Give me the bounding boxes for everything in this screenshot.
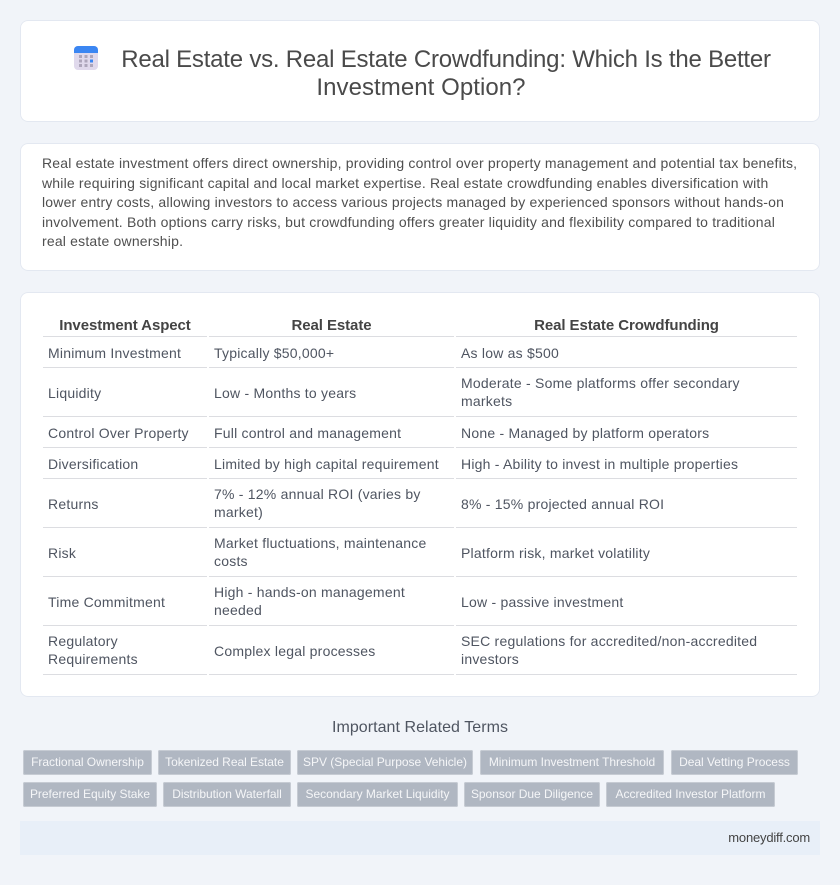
related term tags: Distribution Waterfall xyxy=(172,787,282,801)
row: minimum investment xyxy=(43,345,797,368)
row: minimum investment: Typically $50,000+ xyxy=(214,345,334,361)
related term tags: Fractional Ownership xyxy=(31,755,144,769)
row: diversification xyxy=(43,456,797,479)
related term tags xyxy=(23,750,798,807)
row: time commitment xyxy=(43,584,797,626)
related term tags: Deal Vetting Process xyxy=(679,755,790,769)
row: time commitment: Low - passive investment xyxy=(461,594,623,610)
row: diversification: High - Ability to invest in multiple properties xyxy=(461,456,738,472)
row: risk: Platform risk, market volatility xyxy=(461,545,650,561)
row: minimum investment: Minimum Investment xyxy=(48,345,181,361)
title: Investment Option? xyxy=(316,74,526,101)
row: regulatory requirements: investors xyxy=(461,651,519,667)
row: control over property: None - Managed by platform operators xyxy=(461,425,709,441)
row: returns: 8% - 15% projected annual ROI xyxy=(461,496,664,512)
row: time commitment: needed xyxy=(214,602,262,618)
row: regulatory requirements: Regulatory xyxy=(48,633,118,649)
table header: Real Estate xyxy=(292,317,372,334)
row: regulatory requirements xyxy=(43,633,797,675)
related term tags: SPV (Special Purpose Vehicle) xyxy=(303,755,467,769)
table header xyxy=(43,317,797,337)
row: diversification: Diversification xyxy=(48,456,138,472)
row: risk xyxy=(43,535,797,577)
title xyxy=(121,46,771,101)
row: control over property: Control Over Property xyxy=(48,425,189,441)
row: liquidity: markets xyxy=(461,393,512,409)
row: minimum investment: As low as $500 xyxy=(461,345,559,361)
row: risk: Market fluctuations, maintenance xyxy=(214,535,426,551)
row: liquidity xyxy=(43,375,797,417)
icon: calendar xyxy=(74,46,98,70)
text block: introduction: lower entry costs, allowing investors to access various projects managed by experienced sponsors without hands-on xyxy=(42,194,784,210)
text block: introduction xyxy=(42,155,797,249)
related term tags: Accredited Investor Platform xyxy=(616,787,765,801)
row: returns: Returns xyxy=(48,496,99,512)
table header: Investment Aspect xyxy=(59,317,191,334)
row: diversification: Limited by high capital requirement xyxy=(214,456,439,472)
title: Real Estate vs. Real Estate Crowdfunding: Which Is the Better xyxy=(121,46,771,73)
row: liquidity: Moderate - Some platforms offer secondary xyxy=(461,375,740,391)
text block: introduction: real estate ownership. xyxy=(42,233,183,249)
table header: Real Estate Crowdfunding xyxy=(534,317,719,334)
row: liquidity: Low - Months to years xyxy=(214,385,356,401)
row: regulatory requirements: Complex legal processes xyxy=(214,643,375,659)
related term tags: Tokenized Real Estate xyxy=(165,755,284,769)
heading: related terms: Important Related Terms xyxy=(332,719,508,736)
row: returns: market) xyxy=(214,504,263,520)
text block: introduction: Real estate investment offers direct ownership, providing control over property management and potential tax benefits, xyxy=(42,155,797,171)
row: time commitment: High - hands-on management xyxy=(214,584,405,600)
row: liquidity: Liquidity xyxy=(48,385,101,401)
related term tags: Sponsor Due Diligence xyxy=(471,787,593,801)
text block: introduction: involvement. Both options carry risks, but crowdfunding offers greater liquidity and flexibility compared to traditional xyxy=(42,214,775,230)
row: control over property xyxy=(43,425,797,448)
footer xyxy=(20,821,820,855)
related term tags: Preferred Equity Stake xyxy=(30,787,150,801)
related term tags: Secondary Market Liquidity xyxy=(306,787,449,801)
text block: introduction: while requiring significant capital and local market expertise. Real estate crowdfunding enables diversification with xyxy=(42,174,768,190)
row: time commitment: Time Commitment xyxy=(48,594,165,610)
row: returns xyxy=(43,486,797,528)
panel: comparison table xyxy=(20,292,820,697)
panel: introduction xyxy=(20,143,820,271)
panel: header xyxy=(20,20,820,122)
row: risk: Risk xyxy=(48,545,76,561)
row: returns: 7% - 12% annual ROI (varies by xyxy=(214,486,421,502)
row: regulatory requirements: SEC regulations for accredited/non-accredited xyxy=(461,633,757,649)
related term tags: Minimum Investment Threshold xyxy=(489,755,655,769)
row: risk: costs xyxy=(214,553,248,569)
row: control over property: Full control and management xyxy=(214,425,401,441)
footer text: moneydiff.com xyxy=(728,830,810,845)
row: regulatory requirements: Requirements xyxy=(48,651,138,667)
